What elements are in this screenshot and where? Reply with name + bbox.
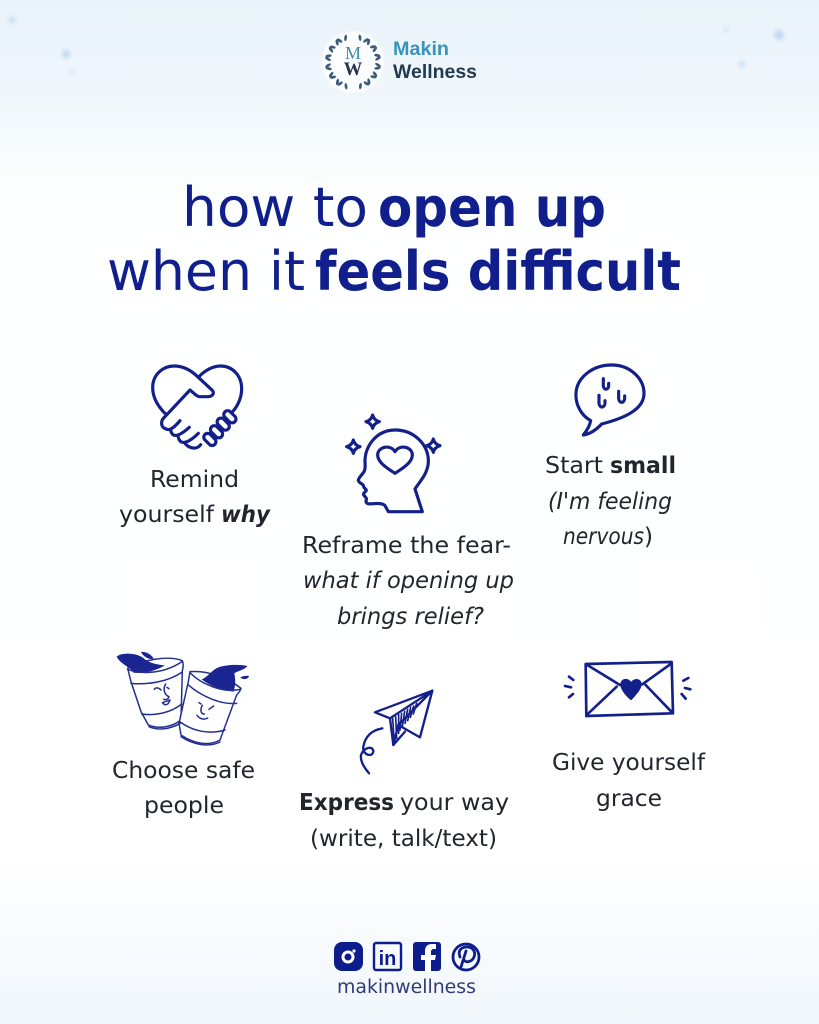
icon: envelope with heart	[565, 662, 690, 716]
label: reframe the fear	[302, 532, 514, 630]
logo badge: W	[344, 60, 363, 80]
cup liquid	[117, 652, 249, 692]
title: when it	[107, 240, 305, 303]
label: reframe the fear: brings relief?	[337, 603, 484, 630]
icon: instagram	[334, 942, 363, 971]
label: start small: )	[644, 523, 653, 550]
icon: facebook	[413, 942, 441, 971]
label: choose safe people: Choose safe	[112, 757, 255, 784]
label: express your way: your way	[400, 789, 509, 816]
label: start small: (I'm feeling	[548, 488, 672, 515]
icon: linkedin: in	[379, 948, 396, 970]
icon: speech bubble with droplets	[576, 365, 644, 435]
label: express your way: Express	[299, 789, 394, 816]
logo badge	[322, 31, 384, 93]
icon: handshake heart	[153, 366, 242, 448]
label: start small	[545, 452, 676, 550]
footer	[334, 942, 479, 998]
handle: makinwellness	[337, 977, 476, 998]
label: give yourself grace: Give yourself	[552, 749, 706, 776]
title: how to	[182, 176, 368, 239]
label: remind yourself why: Remind	[150, 466, 239, 493]
brand name: Wellness	[393, 61, 477, 83]
label: reframe the fear: Reframe the fear-	[302, 532, 511, 559]
label: express your way	[299, 789, 509, 852]
title: open up	[378, 176, 606, 239]
label: remind yourself why: yourself	[119, 501, 215, 528]
label: remind yourself why: why	[221, 501, 271, 528]
icon: pinterest	[453, 944, 479, 970]
panel: express your way	[299, 691, 509, 852]
label: reframe the fear: what if opening up	[303, 567, 514, 594]
icon: paper plane	[361, 691, 432, 773]
label: choose safe people: people	[144, 792, 224, 819]
label: give yourself grace: grace	[596, 785, 662, 812]
label: give yourself grace	[552, 749, 706, 812]
panel: remind yourself why	[119, 366, 271, 528]
logo badge: M	[345, 43, 361, 63]
panel: reframe the fear	[302, 415, 514, 630]
panel: choose safe people	[112, 652, 255, 819]
title: feels difficult	[315, 240, 681, 303]
panel: start small	[545, 365, 676, 550]
label: start small: Start	[545, 452, 603, 479]
label: start small: small	[610, 452, 676, 479]
label: start small: nervous	[563, 523, 644, 550]
brand name: Makin	[393, 38, 449, 60]
label: choose safe people	[112, 757, 255, 819]
icon: head with heart and sparkles	[347, 415, 440, 512]
icon: linkedin	[374, 943, 401, 970]
label: express your way: (write, talk/text)	[310, 825, 497, 852]
logo	[322, 31, 477, 93]
icon: two cups with faces	[117, 652, 249, 745]
label: remind yourself why	[119, 466, 271, 528]
brand name	[393, 38, 477, 83]
title	[107, 176, 681, 303]
panel: give yourself grace	[552, 662, 706, 812]
